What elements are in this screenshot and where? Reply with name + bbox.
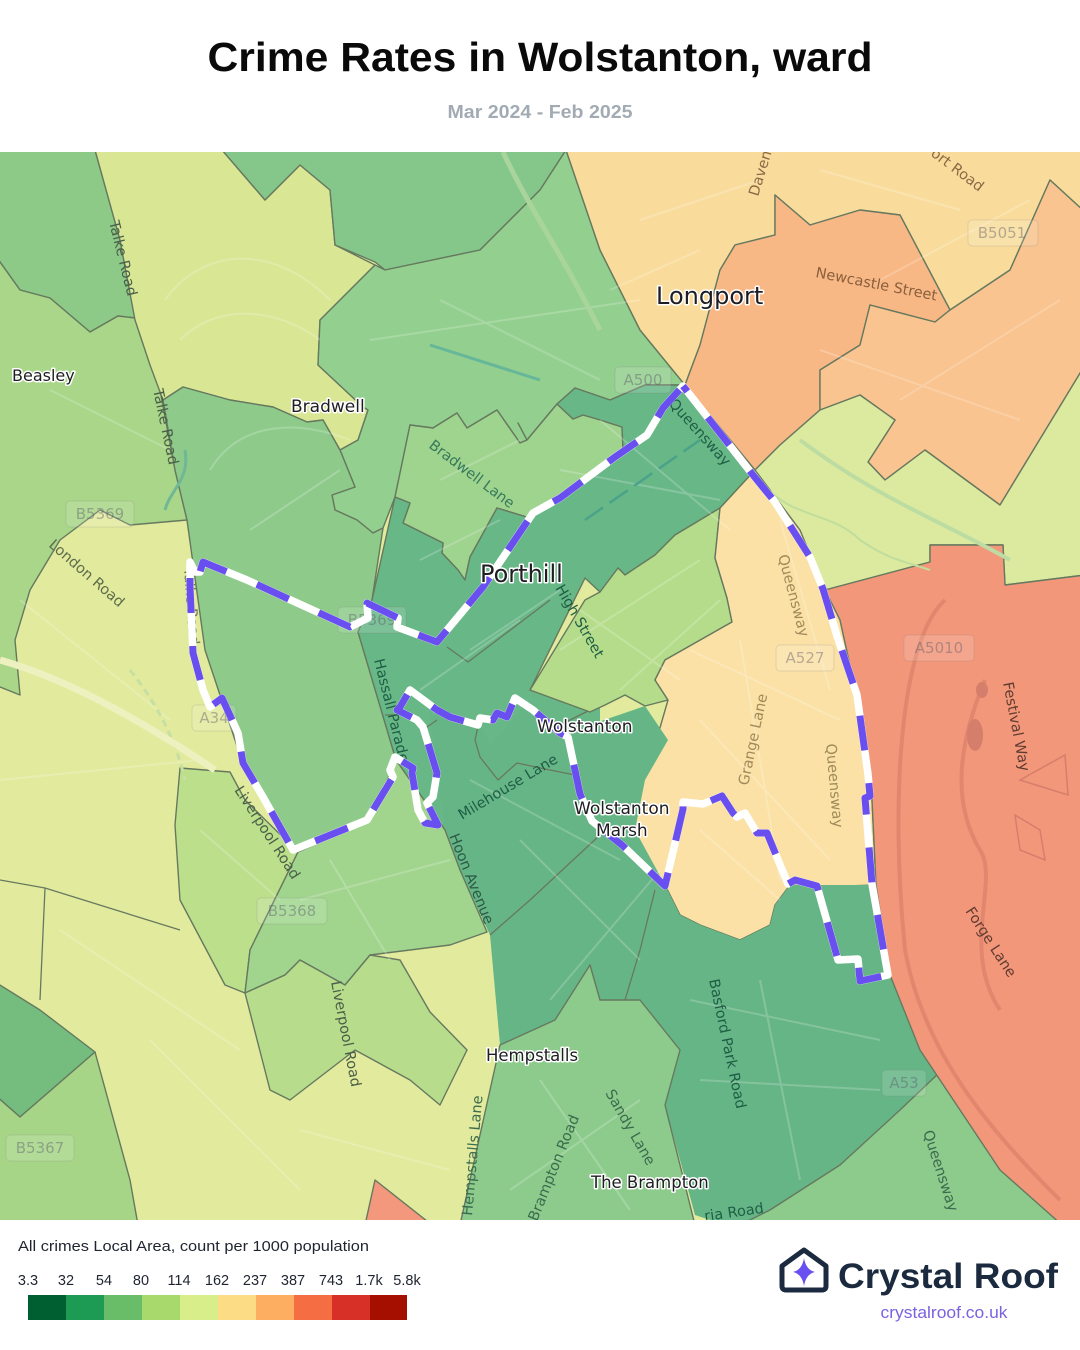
place name labels: Beasley — [12, 366, 75, 385]
road number labels: A500 — [624, 371, 662, 389]
road name labels: Bradwell Lane — [426, 437, 517, 512]
internal area boundaries — [0, 600, 655, 1000]
website url: crystalroof.co.uk — [880, 1304, 1008, 1322]
road name labels: Queensway — [822, 743, 845, 829]
road name labels: Hassall Parade — [370, 657, 411, 764]
road number labels: B5368 — [268, 902, 316, 920]
rivers and main roads — [0, 152, 1068, 1200]
road name labels: Basford Park Road — [705, 978, 748, 1110]
legend scale labels: 54 — [96, 1273, 112, 1289]
place name labels: Marsh — [596, 821, 648, 841]
street texture — [0, 170, 1060, 1210]
road name labels: Forge Lane — [962, 904, 1019, 981]
place name labels: Wolstanton — [574, 799, 670, 819]
road name labels: ria Road — [703, 1201, 765, 1225]
road name labels: Sandy Lane — [602, 1087, 658, 1168]
road name labels: Talke Road — [149, 387, 181, 466]
road name labels: Newcastle Street — [814, 265, 939, 305]
road number labels: B5367 — [16, 1139, 64, 1157]
place name labels: Hempstalls — [486, 1046, 578, 1065]
road name labels: Talke Road — [105, 218, 139, 298]
legend scale labels: 32 — [58, 1273, 74, 1289]
ward boundary: white line with purple dashes — [190, 386, 888, 981]
brand name: Crystal Roof — [838, 1257, 1058, 1296]
place name labels: Longport — [656, 282, 763, 310]
road name labels: Talke Road — [180, 566, 201, 645]
road number labels — [16, 224, 1026, 1157]
road number labels: A5010 — [915, 639, 963, 657]
logo: Crystal Roof — [782, 1250, 1058, 1322]
place name labels — [12, 282, 763, 1192]
road name labels: ort Road — [928, 145, 986, 195]
road name labels: Milehouse Lane — [456, 752, 561, 823]
legend scale labels: 1.7k — [355, 1273, 383, 1289]
icon: house with star — [782, 1250, 826, 1290]
road name labels: Liverpool Road — [327, 980, 363, 1088]
legend colour bar — [28, 1295, 407, 1320]
road name labels: High Street — [552, 582, 607, 661]
subtitle: date range: Mar 2024 - Feb 2025 — [448, 101, 632, 122]
road number labels: A34 — [199, 709, 229, 727]
road number labels: A527 — [786, 649, 824, 667]
place name labels: Porthill — [480, 560, 563, 588]
legend scale labels: 3.3 — [18, 1273, 38, 1289]
legend scale labels: 80 — [133, 1273, 149, 1289]
place name labels: The Brampton — [590, 1173, 709, 1192]
choropleth areas — [0, 150, 1080, 1230]
road number shields — [6, 220, 1038, 1161]
legend title: All crimes Local Area, count per 1000 population — [18, 1238, 369, 1255]
road name labels: Davenp — [747, 140, 778, 198]
legend scale labels: 387 — [281, 1273, 305, 1289]
road name labels: Festival Way — [999, 681, 1032, 773]
legend scale labels: 743 — [319, 1273, 343, 1289]
road name labels: Queensway — [774, 553, 812, 639]
road name labels: Grange Lane — [736, 692, 771, 787]
legend scale labels: 5.8k — [393, 1273, 421, 1289]
road number labels: B5051 — [978, 224, 1026, 242]
place name labels: Bradwell — [291, 397, 365, 417]
road name labels: Liverpool Road — [231, 783, 303, 882]
road number labels: A53 — [889, 1074, 919, 1092]
road name labels: Hoon Avenue — [445, 832, 496, 927]
legend scale labels: 114 — [167, 1273, 191, 1289]
legend scale labels: 237 — [243, 1273, 267, 1289]
title: Crime Rates in Wolstanton, ward — [208, 34, 872, 80]
road number labels: B5369 — [348, 611, 396, 629]
road name labels: Brampton Road — [526, 1113, 583, 1223]
road name labels: Queensway — [665, 396, 734, 470]
road name labels — [45, 140, 1032, 1225]
place name labels: Wolstanton — [537, 717, 632, 737]
legend scale labels: 162 — [205, 1273, 229, 1289]
legend — [18, 1238, 421, 1320]
road name labels: Hempstalls Lane — [460, 1095, 487, 1216]
road name labels: London Road — [45, 537, 127, 611]
legend scale labels — [18, 1273, 421, 1289]
road name labels: Queensway — [919, 1128, 961, 1214]
road number labels: B5369 — [76, 505, 124, 523]
